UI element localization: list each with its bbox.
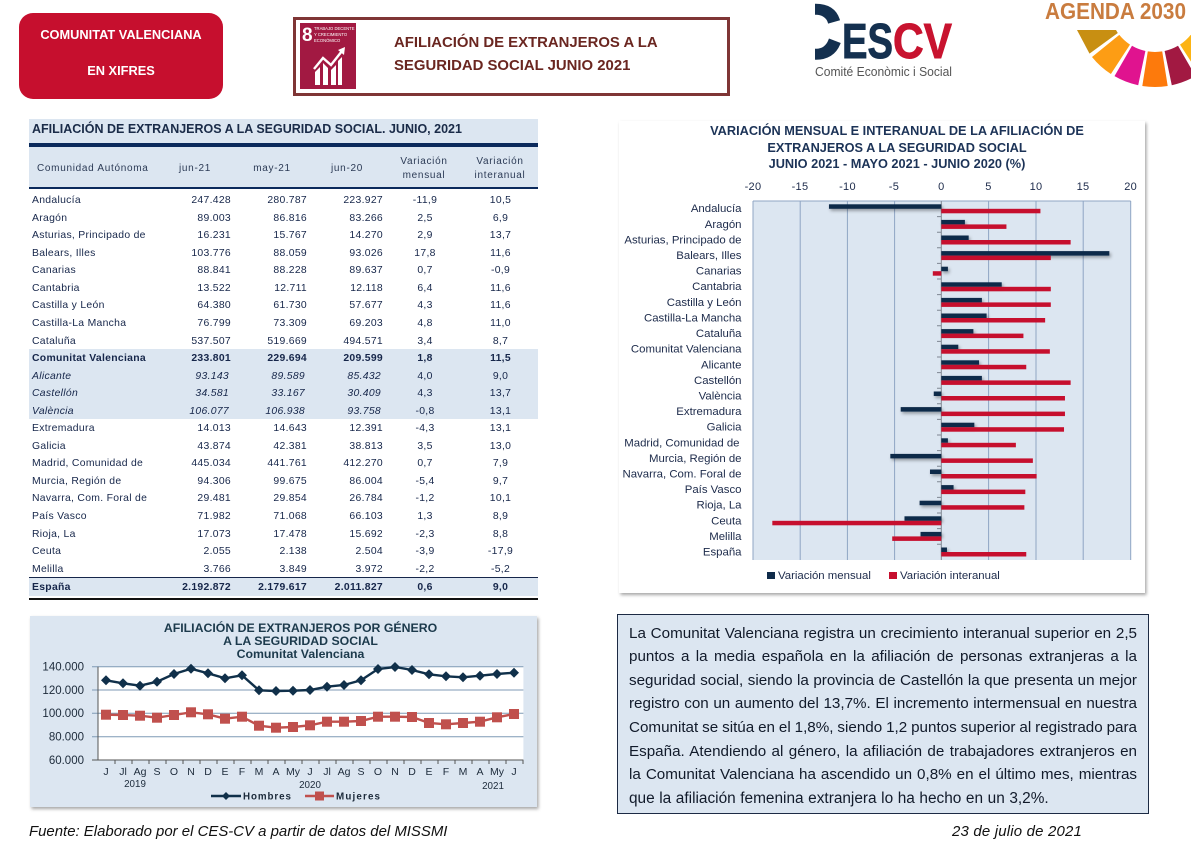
line chart y axis labels: 140.000 — [42, 662, 84, 674]
table body: 61.730 — [273, 300, 307, 311]
line chart x axis labels: S — [153, 766, 161, 778]
line chart x axis labels: N — [187, 766, 195, 778]
table body: 12.711 — [274, 283, 307, 294]
bar chart top axis labels: -10 — [839, 181, 856, 193]
bar chart category labels: Galicia — [707, 422, 742, 434]
table body: 88.059 — [273, 248, 307, 259]
table body: 2.011.827 — [335, 582, 383, 593]
table header row: jun-21 — [179, 163, 211, 174]
table body: Cantabria — [32, 283, 80, 294]
bar chart top axis labels: -15 — [792, 181, 808, 193]
line chart legend: Mujeres — [336, 792, 381, 802]
bar chart category labels: València — [699, 390, 742, 402]
table body: 3.766 — [203, 564, 231, 575]
table body: 15.767 — [273, 230, 307, 241]
bar chart category labels: Castilla y León — [667, 297, 742, 309]
bar chart category labels: Balears, Illes — [676, 250, 742, 262]
table body: 89.637 — [349, 265, 383, 276]
line chart x axis labels: S — [357, 766, 365, 778]
text block: commentary — [617, 614, 1149, 814]
icon: SDG 8 decent work: ECONÓMICO — [314, 38, 341, 43]
line chart title: Comunitat Valenciana — [237, 647, 365, 661]
bar chart title: JUNIO 2021 - MAYO 2021 - JUNIO 2020 (%) — [769, 156, 1025, 171]
table body: -17,9 — [488, 546, 513, 557]
table header row: mensual — [403, 170, 445, 181]
table header row: Variación — [476, 156, 524, 167]
table body: -4,3 — [415, 423, 435, 434]
bar chart category labels: Navarra, Com. Foral de — [622, 468, 742, 480]
line chart x axis labels: A — [272, 766, 280, 778]
table body: 89.003 — [197, 213, 231, 224]
bars: variación interanual — [772, 209, 1071, 557]
bar chart category labels: Andalucía — [691, 203, 742, 215]
logo: CES-CV — [815, 4, 952, 79]
table body: 71.982 — [197, 511, 231, 522]
bar chart top axis labels: 5 — [985, 181, 992, 193]
bar chart group — [619, 121, 1145, 593]
table body: 2.192.872 — [182, 582, 231, 593]
table body: Extremadura — [32, 423, 95, 434]
table body: 0,6 — [417, 582, 433, 593]
table body: -2,3 — [415, 529, 435, 540]
table body: 13.522 — [197, 283, 231, 294]
table body: Melilla — [32, 564, 64, 575]
table header row: jun-20 — [331, 163, 363, 174]
bar chart category labels: Comunitat Valenciana — [631, 344, 742, 356]
table body: -1,2 — [415, 493, 435, 504]
line chart x axis labels: J — [307, 766, 313, 778]
table body: 17,8 — [414, 248, 436, 259]
table body: 8,7 — [493, 336, 508, 347]
table body: 4,3 — [417, 300, 433, 311]
bar chart category labels: Melilla — [709, 531, 742, 543]
table title band: AFILIACIÓN DE EXTRANJEROS A LA SEGURIDAD SOCIAL. JUNIO, 2021 — [32, 122, 462, 136]
table body: 13,0 — [490, 441, 511, 452]
table body: 9,0 — [493, 371, 508, 382]
table body: 4,3 — [417, 388, 433, 399]
table body: Balears, Illes — [32, 248, 96, 259]
line chart x axis labels — [103, 766, 517, 792]
table header row: may-21 — [253, 163, 291, 174]
table body: Cataluña — [32, 336, 76, 347]
line chart x axis labels: E — [221, 766, 229, 778]
table body: 42.381 — [273, 441, 307, 452]
line chart title — [164, 620, 438, 661]
table body: Comunitat Valenciana — [32, 353, 146, 364]
line chart x axis labels: D — [204, 766, 212, 778]
table body: Galicia — [32, 441, 66, 452]
footer: date: 23 de julio de 2021 — [952, 822, 1082, 840]
icon: SDG 8 decent work: Y CRECIMIENTO — [314, 32, 348, 37]
table body: España — [32, 582, 71, 593]
bar chart category labels: Asturias, Principado de — [624, 234, 742, 246]
table body: Rioja, La — [32, 529, 76, 540]
line chart y axis labels: 120.000 — [42, 685, 84, 697]
table body: 0,7 — [417, 265, 433, 276]
bar chart category labels: Castilla-La Mancha — [644, 312, 742, 324]
line chart legend — [211, 792, 381, 802]
table body: 209.599 — [343, 353, 383, 364]
table body: 6,4 — [417, 283, 433, 294]
table body: Canarias — [32, 265, 76, 276]
table body: 3.972 — [355, 564, 383, 575]
line: Mujeres — [106, 712, 514, 728]
table body: 10,1 — [490, 493, 511, 504]
table body: Aragón — [32, 213, 67, 224]
bar chart legend — [767, 570, 1000, 582]
table body: Ceuta — [32, 546, 61, 557]
bar chart top axis labels — [745, 181, 1137, 193]
bar chart category labels: Cantabria — [692, 281, 742, 293]
table body: 13,1 — [490, 423, 511, 434]
text block: commentary: registro con un aumento del 13,7%. El incremento intermensual en nuestra — [629, 695, 1137, 712]
table body: 0,7 — [417, 458, 433, 469]
line chart x axis labels: F — [239, 766, 245, 778]
table body: 2,5 — [417, 213, 433, 224]
table body: 2.138 — [279, 546, 307, 557]
line chart x axis labels: E — [425, 766, 433, 778]
table body: 14.013 — [197, 423, 231, 434]
table body: 13,7 — [490, 388, 511, 399]
table body: 537.507 — [191, 336, 231, 347]
line chart group — [30, 616, 537, 807]
line chart title: AFILIACIÓN DE EXTRANJEROS POR GÉNERO — [164, 620, 438, 635]
table body: 66.103 — [349, 511, 383, 522]
table body: 17.073 — [197, 529, 231, 540]
bar chart legend: Variación interanual — [900, 570, 1000, 582]
table body: 229.694 — [267, 353, 307, 364]
table body: 93.143 — [195, 371, 229, 382]
table body: 233.801 — [191, 353, 231, 364]
table body: 43.874 — [197, 441, 231, 452]
table body: 1,3 — [417, 511, 433, 522]
line chart x axis labels: 2021 — [482, 781, 504, 792]
table body: 94.306 — [197, 476, 231, 487]
table body: 3,5 — [417, 441, 433, 452]
table body: 3,4 — [417, 336, 433, 347]
table body: 9,7 — [493, 476, 508, 487]
line chart y axis labels: 80.000 — [49, 732, 84, 744]
text block: commentary: la Comunitat Valenciana ha ascendido un 0,8% en el último mes, mientras — [629, 766, 1137, 783]
line chart x axis labels: J — [511, 766, 517, 778]
table body: -5,2 — [491, 564, 510, 575]
table body: 71.068 — [273, 511, 307, 522]
table body: 15.692 — [349, 529, 383, 540]
table body: 11,6 — [490, 283, 511, 294]
table body: València — [32, 406, 74, 417]
bar chart category labels: País Vasco — [685, 484, 742, 496]
text block: commentary: puntos a la media española en la afiliación de personas extranjeras a la — [629, 648, 1137, 665]
icon: SDG 8 decent work: 8 — [302, 25, 313, 46]
heading: report title: SEGURIDAD SOCIAL JUNIO 2021 — [394, 58, 630, 74]
line chart x axis labels: O — [374, 766, 382, 778]
line chart y axis labels — [42, 662, 84, 767]
line chart x axis labels: My — [490, 766, 505, 778]
table body: Castilla y León — [32, 300, 105, 311]
table body: 30.409 — [347, 388, 381, 399]
icon: SDG 8 decent work: TRABAJO DECENTE — [314, 26, 355, 31]
table body: 8,9 — [493, 511, 508, 522]
table body: 103.776 — [191, 248, 231, 259]
table body: 519.669 — [267, 336, 307, 347]
table body: Asturias, Principado de — [32, 230, 146, 241]
line chart x axis labels: N — [391, 766, 399, 778]
table body: 280.787 — [267, 195, 307, 206]
badge: Comunitat Valenciana en xifres: COMUNITAT VALENCIANA — [40, 27, 202, 42]
bar chart category labels: Murcia, Región de — [649, 453, 742, 465]
table title band — [29, 119, 538, 143]
logo: Agenda 2030 wheel — [1045, 0, 1191, 87]
text block: commentary: España. Atendiendo al género, la afiliación de trabajadores extranjeros en — [629, 743, 1137, 760]
table body: 445.034 — [191, 458, 231, 469]
table body: Andalucía — [32, 195, 81, 206]
logo: CES-CV: ES — [842, 15, 893, 69]
table body: 8,8 — [493, 529, 508, 540]
line chart legend: Hombres — [243, 792, 292, 802]
bar chart top axis labels: -5 — [889, 181, 899, 193]
bar chart top axis labels: 10 — [1030, 181, 1042, 193]
table body: 93.758 — [347, 406, 381, 417]
table header row: Comunidad Autónoma — [37, 163, 149, 174]
table body: 2,9 — [417, 230, 433, 241]
table body: 16.231 — [197, 230, 231, 241]
line chart x axis labels: Ag — [338, 766, 351, 778]
table body: Navarra, Com. Foral de — [32, 493, 147, 504]
table body: 9,0 — [493, 582, 508, 593]
line chart x axis labels: D — [408, 766, 416, 778]
line chart x axis labels: My — [286, 766, 301, 778]
line chart x axis labels: M — [255, 766, 263, 778]
table body: 2.179.617 — [258, 582, 307, 593]
line chart y axis labels: 100.000 — [42, 708, 84, 720]
table body: 1,8 — [417, 353, 433, 364]
table body: 106.077 — [189, 406, 229, 417]
line chart x axis labels: A — [476, 766, 484, 778]
table body: 89.589 — [271, 371, 305, 382]
table body: 223.927 — [343, 195, 383, 206]
line chart x axis labels: 2019 — [124, 779, 146, 790]
line chart x axis labels: Ag — [134, 766, 147, 778]
bar chart category labels: Madrid, Comunidad de — [624, 438, 740, 450]
table body: 10,5 — [490, 195, 511, 206]
footer: source: Fuente: Elaborado por el CES-CV a partir de datos del MISSMI — [29, 822, 447, 840]
table body: 13,7 — [490, 230, 511, 241]
bars: variación mensual — [829, 204, 1109, 552]
text block: commentary: que la afiliación femenina extranjera lo ha hecho en un 3,2%. — [629, 790, 1049, 807]
table body: -5,4 — [415, 476, 435, 487]
table body: 7,9 — [493, 458, 508, 469]
bar chart legend: Variación mensual — [778, 570, 871, 582]
table body: 99.675 — [273, 476, 307, 487]
table body: 69.203 — [349, 318, 383, 329]
table body: Castilla-La Mancha — [32, 318, 126, 329]
table body: 11,0 — [490, 318, 511, 329]
table body: 6,9 — [493, 213, 508, 224]
bar chart title — [710, 123, 1084, 171]
table body: 88.841 — [197, 265, 231, 276]
text block: commentary: Comunitat se sitúa en el 1,8%, siendo 1,2 puntos superior al registrado para — [629, 719, 1137, 736]
table body: 57.677 — [349, 300, 383, 311]
line chart y axis labels: 60.000 — [49, 755, 84, 767]
table body: 494.571 — [343, 336, 383, 347]
table body: 38.813 — [349, 441, 383, 452]
table body: 412.270 — [343, 458, 383, 469]
table body: 4,8 — [417, 318, 433, 329]
table body: 26.784 — [349, 493, 383, 504]
table body: 14.270 — [349, 230, 383, 241]
line: Hombres — [106, 667, 514, 691]
badge: Comunitat Valenciana en xifres — [19, 13, 223, 99]
bar chart category labels: Extremadura — [676, 406, 742, 418]
table body: 33.167 — [271, 388, 305, 399]
table body: 29.854 — [273, 493, 307, 504]
table body: Madrid, Comunidad de — [32, 458, 143, 469]
table body: 34.581 — [195, 388, 229, 399]
line chart x axis labels: M — [459, 766, 467, 778]
table body: 73.309 — [273, 318, 307, 329]
table header row: interanual — [475, 170, 525, 181]
panel: data table — [29, 119, 538, 600]
table body: 93.026 — [349, 248, 383, 259]
table body: 88.228 — [273, 265, 307, 276]
line chart x axis labels: Jl — [323, 766, 331, 778]
table body: 2.504 — [355, 546, 383, 557]
bar chart category labels — [622, 203, 742, 558]
bar chart category labels: Canarias — [696, 266, 742, 278]
bar chart top axis labels: 20 — [1124, 181, 1137, 193]
bar chart category labels: España — [703, 546, 742, 558]
line chart x axis labels: Jl — [119, 766, 127, 778]
logo: CES-CV: Comité Econòmic i Social — [815, 64, 952, 79]
table body: 12.391 — [349, 423, 383, 434]
bar chart category labels: Rioja, La — [697, 500, 742, 512]
table body: Castellón — [32, 388, 78, 399]
heading: report title: AFILIACIÓN DE EXTRANJEROS A LA — [394, 35, 658, 51]
table body: 76.799 — [197, 318, 231, 329]
table body: 17.478 — [273, 529, 307, 540]
table body: 29.481 — [197, 493, 231, 504]
table body: 11,6 — [490, 300, 511, 311]
table body: 86.816 — [273, 213, 307, 224]
table body: 441.761 — [267, 458, 307, 469]
line chart plot area — [92, 667, 523, 764]
text block: commentary: La Comunitat Valenciana registra un crecimiento interanual superior en 2,5 — [629, 624, 1137, 642]
bar chart title: VARIACIÓN MENSUAL E INTERANUAL DE LA AFILIACIÓN DE — [710, 123, 1084, 138]
bar chart category labels: Aragón — [705, 219, 742, 231]
table body: -11,9 — [413, 195, 437, 206]
table body: -2,2 — [415, 564, 435, 575]
table body: Murcia, Región de — [32, 476, 121, 487]
table header row: Variación — [400, 156, 448, 167]
bar chart category labels: Castellón — [694, 375, 742, 387]
bar chart category labels: Alicante — [701, 360, 742, 372]
text block: commentary: seguridad social, siendo la provincia de Castellón la que presenta un mejor — [629, 672, 1137, 689]
line chart x axis labels: O — [170, 766, 178, 778]
table body — [29, 195, 538, 596]
line chart title: A LA SEGURIDAD SOCIAL — [223, 634, 378, 648]
bar chart top axis labels: 0 — [938, 181, 945, 193]
table body: -3,9 — [415, 546, 435, 557]
table body: 14.643 — [273, 423, 307, 434]
table body: 13,1 — [490, 406, 511, 417]
table body: 86.004 — [349, 476, 383, 487]
table body: -0,9 — [491, 265, 510, 276]
table body: 11,5 — [490, 353, 511, 364]
table body: 83.266 — [349, 213, 383, 224]
table header row — [29, 143, 538, 189]
icon: SDG 8 decent work — [300, 23, 356, 89]
line chart x axis labels: 2020 — [299, 780, 321, 791]
table body: País Vasco — [32, 511, 87, 522]
bar chart top axis labels: 15 — [1077, 181, 1089, 193]
line chart x axis labels: F — [443, 766, 449, 778]
table body: 85.432 — [347, 371, 381, 382]
table body: 4,0 — [417, 371, 433, 382]
bar chart title: EXTRANJEROS A LA SEGURIDAD SOCIAL — [767, 140, 1027, 155]
bar chart plot area — [753, 201, 1131, 560]
bar chart category labels: Cataluña — [696, 328, 742, 340]
bar chart category labels: Ceuta — [711, 516, 742, 528]
table body: 2.055 — [203, 546, 231, 557]
logo: CES-CV: CV — [893, 15, 952, 69]
table body: 106.938 — [265, 406, 305, 417]
table body: -0,8 — [415, 406, 435, 417]
table body: 247.428 — [191, 195, 231, 206]
table body: 3.849 — [279, 564, 307, 575]
table body: 12.118 — [350, 283, 383, 294]
table body: 11,6 — [490, 248, 511, 259]
table body: Alicante — [32, 371, 71, 382]
title box border — [293, 17, 730, 96]
bar chart top axis labels: -20 — [745, 181, 761, 193]
table body: 64.380 — [197, 300, 231, 311]
heading: report title — [394, 34, 658, 74]
badge: Comunitat Valenciana en xifres: EN XIFRES — [87, 63, 155, 78]
line chart x axis labels: J — [103, 766, 109, 778]
